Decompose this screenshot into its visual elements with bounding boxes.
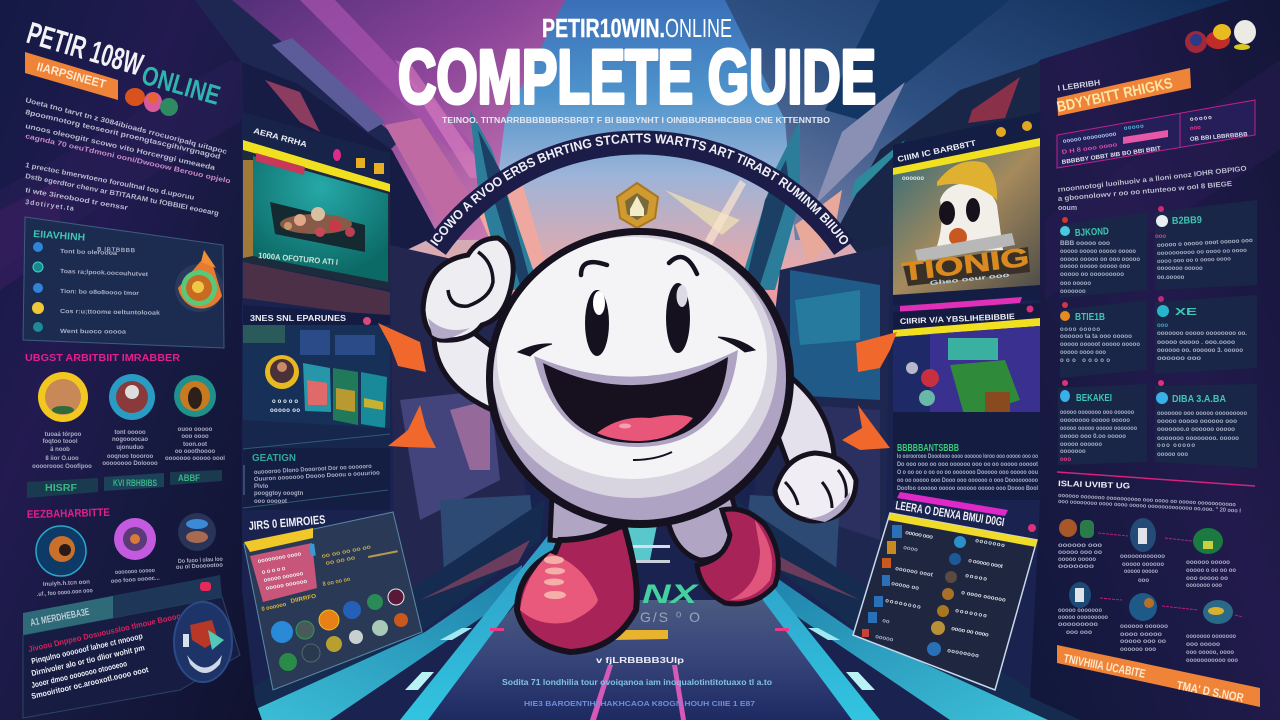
- list rows: oooooooo: [885, 598, 921, 611]
- small buttons: KVI RBHBIBS: [113, 478, 157, 488]
- comparison table: D H 8 ooo oooo: [1061, 142, 1118, 156]
- card header band: [23, 575, 222, 635]
- portrait captions: tont ooooo: [114, 430, 146, 436]
- entries small data: oo oo oo: [325, 555, 356, 567]
- portrait captions: toon.oot: [183, 442, 207, 448]
- mascot mouth: [518, 337, 755, 460]
- tips text rows: B IBTBBBB: [97, 247, 136, 254]
- step captions: ooo ooo: [1066, 630, 1092, 636]
- paragraph: a gboonolowv r oo oo ntunteoo w ooI 8 BIEGE: [1058, 181, 1233, 203]
- step icons: [1059, 518, 1233, 624]
- step icon five: [1129, 593, 1157, 621]
- portrait six: [178, 513, 216, 551]
- creation text section: GEATIGN: [252, 453, 296, 464]
- entries icon grid: [271, 589, 408, 671]
- left panel: [0, 0, 262, 720]
- feature card four: XE: [1175, 307, 1198, 318]
- tips text rows: Tion: bo o8o8oooo tmor: [60, 289, 140, 297]
- how it works heading: ISLAI UVIBT UG: [1058, 479, 1130, 491]
- step captions: ooooooo ooooooo: [1186, 634, 1236, 640]
- step captions: oooooo ooooo: [1186, 560, 1230, 566]
- feature card two: ooooo o ooooo ooot ooooo ooo: [1157, 238, 1253, 249]
- feature card five: BEKAKEI: [1076, 393, 1112, 404]
- feature card two: oo.ooooo: [1157, 275, 1185, 281]
- feature card three: ooo ooooo: [1060, 358, 1110, 364]
- list rows: o ooooo ooot: [968, 558, 1003, 570]
- card body text: Smooiritoor oc.arooxotl.oooo ooot: [30, 665, 150, 701]
- right panel: [1030, 0, 1280, 720]
- feature card five: oooooooo ooooo ooooo: [1060, 418, 1130, 424]
- section text block: O o oo oo o oo oo oo ooooooo Dooooo ooo ooooo oou: [897, 470, 1038, 476]
- entries small data: [261, 544, 398, 613]
- small buttons: HISRF: [45, 483, 77, 494]
- feature card five: ooooo ooooooo ooo oooooo: [1060, 410, 1134, 416]
- tips heading: EIIAVHINH: [33, 229, 85, 244]
- game screen flowers: [270, 202, 365, 252]
- entries small data: 8 oo oo oo: [322, 577, 351, 588]
- portrait two: [109, 374, 155, 420]
- step captions: ooooo ooooo: [1058, 557, 1096, 563]
- art logo: [903, 247, 1030, 286]
- intro text block: 8poomnotorg teoseorit proengtascgihivrgnagod: [25, 109, 221, 161]
- entries tilted card: [244, 512, 422, 690]
- mascot head: [490, 232, 790, 524]
- intro text block: 3dotiryet.ta: [25, 199, 74, 213]
- feature card six: ooo ooooo: [1157, 443, 1195, 449]
- entries pink box: [250, 543, 317, 602]
- comparison table: ooooo ooooooooo: [1062, 131, 1117, 145]
- list rows: o oooo oooooo: [961, 590, 1006, 604]
- step icon two: [1130, 518, 1156, 552]
- games cards section: ooooo oo: [270, 408, 300, 414]
- shield badge: [617, 183, 658, 228]
- art tagline: Gheo oeur ooo: [930, 273, 1010, 287]
- feature card three: ooooo ooooot ooooo ooooo: [1060, 342, 1140, 348]
- portrait row one: [38, 372, 216, 422]
- card body text: [30, 632, 150, 701]
- intro text block: 1 prectoc bmerwtoeno foroultnal too d.uporuu: [25, 162, 195, 202]
- list card heading: LEERA O DENXA BMUI D0GI: [895, 498, 1005, 529]
- portrait row two captions: ooooooo ooooo: [115, 568, 155, 576]
- card body text: Jooor dmoo ooooooo otoooeoo: [30, 659, 128, 690]
- feature card six: ooooooo oooooooo. ooooo: [1157, 436, 1239, 442]
- intro text block: unoos oleoogitr scowo vito Horcerggi umeaeda: [25, 123, 216, 172]
- portrait captions: ooqnoo toooroo: [107, 454, 153, 460]
- bottom feature card: [23, 575, 240, 718]
- game screen card: [243, 112, 390, 318]
- feature card one: ooooo oo ooooooooo: [1060, 272, 1124, 278]
- eyebrow text: I LEBRIBH: [1057, 78, 1101, 93]
- step captions: ooooooo: [1058, 564, 1094, 570]
- step captions: [1058, 543, 1238, 664]
- games portrait: [265, 355, 299, 389]
- step captions: ooooo ooooooooo: [1058, 615, 1108, 621]
- orange footer banner: TMA' D S.NOR: [1175, 678, 1245, 705]
- step captions: ooooo ooo oo: [1058, 550, 1102, 556]
- tips text rows: [60, 247, 161, 336]
- feature card three: oooo ooooo: [1060, 327, 1100, 333]
- creation text section: ouoooroo Dlono Doooroot Dor oo oooooro: [254, 464, 372, 476]
- creation text section: ooo ooooot: [254, 499, 287, 505]
- portrait captions: ä noob: [50, 447, 70, 453]
- portrait row two captions: Do fuoo l olau loo: [178, 557, 223, 565]
- portrait captions: oooooooo Doloooo: [102, 461, 158, 467]
- feature card six: DIBA 3.A.BA: [1172, 394, 1226, 405]
- left title: PETIR 108W: [23, 15, 148, 83]
- tips text rows: Tont bo oleroooa: [60, 249, 118, 257]
- orange banner heading: BDYYBITT RHIGKS: [1055, 75, 1174, 116]
- arched banner: [426, 130, 854, 255]
- road caption line two: HIE3 BAROENTIHIIHAKHCAOA K8OGN HOUH CIIIE 1 E87: [524, 701, 755, 708]
- tips text rows: Cos r:u;ttoome oeltuntolooak: [60, 309, 161, 317]
- tips text rows: Went buoco ooooa: [60, 329, 127, 336]
- list middle icons: [927, 536, 966, 656]
- tips round badge: [175, 250, 223, 312]
- tips icon list: [32, 242, 44, 332]
- mascot right boot: [697, 509, 778, 604]
- games header band: 3NES SNL EPARUNES: [250, 314, 347, 323]
- feature card five: ooo: [1060, 457, 1071, 463]
- feature card one: ooooo ooooo oo ooo ooooo: [1060, 257, 1140, 263]
- creation text section: Pivlo: [254, 484, 269, 490]
- tips text rows: Toas ra;lpook.oocouhutvet: [60, 269, 148, 278]
- list rows: oooooooo: [947, 648, 980, 660]
- card round art: [174, 602, 232, 682]
- ghost art card: oooooo: [902, 176, 924, 182]
- screen caption: 1000A OFOTURO ATI I: [258, 251, 338, 267]
- games small cards: [303, 363, 387, 428]
- feature card one: [1060, 212, 1147, 298]
- subtitle: TEINOO. TITNARRBBBBBBRSBRBT F BI BBBYNHT I OINBBURBHBCBBB CNE KTTENNTBO: [442, 116, 830, 125]
- feature card one: BJKOND: [1075, 226, 1109, 239]
- portrait captions: ooooooo ooooo oool: [165, 456, 225, 462]
- pink heading two: EEZBAHARBITTE: [27, 507, 110, 521]
- feature card six: [1155, 380, 1257, 468]
- portrait captions: ooooroooc Ooofipoo: [32, 464, 92, 470]
- entries small data: DIIRRFO: [290, 594, 317, 605]
- portrait four: [36, 526, 86, 576]
- step icon six: [1203, 600, 1233, 624]
- header icons: [333, 149, 384, 174]
- games cards section: ooooo: [272, 399, 298, 405]
- feature card one: ooooooo: [1060, 289, 1086, 295]
- feature card four: oooooo ooo: [1157, 356, 1201, 362]
- list rows: ooooo ooo: [905, 530, 934, 541]
- icon cluster: game characters: [125, 88, 178, 116]
- creation text section: [243, 434, 390, 510]
- comparison table: ooooo: [1124, 124, 1144, 132]
- games header band: [243, 305, 390, 332]
- step captions: oooooo oooooo: [1120, 624, 1168, 630]
- feature card six: ooooo ooo: [1157, 452, 1188, 458]
- step captions: ooooo o oo oo oo: [1186, 568, 1236, 574]
- list rows: ooooo: [875, 634, 894, 644]
- road caption small: v fjLRBBBB3Ulp: [596, 656, 684, 665]
- step captions: oooo ooooo: [1120, 632, 1162, 638]
- games cards section: [243, 325, 390, 453]
- paragraph: ooum: [1058, 205, 1077, 212]
- portrait row two captions: [37, 557, 223, 598]
- portrait five: [114, 518, 156, 560]
- feature card four: ooooo ooooo . ooo.oooo: [1157, 340, 1235, 346]
- orange tag: IIARPSINEET: [35, 59, 108, 91]
- road yellow button: [612, 630, 668, 640]
- intro text block: cagnda 70 oeuTdmoni ooni/Dwooow Berouo opjelo: [25, 133, 231, 185]
- feature card one: BBB ooooo ooo: [1060, 241, 1110, 247]
- mascot legs: [550, 490, 738, 560]
- entries small data: 0 oooooo: [261, 602, 287, 613]
- entries pink box: oooooooo oooo: [257, 551, 302, 565]
- portrait row two captions: ooo fooo ooooc...: [111, 576, 160, 585]
- list left icons: [862, 525, 902, 637]
- list rows: ooooooo: [975, 538, 1006, 549]
- small buttons: ABBF: [178, 473, 200, 483]
- orange tag: [25, 52, 118, 100]
- ghost art card: [893, 112, 1040, 305]
- section green heading: BBBBBANTSBBB: [897, 443, 959, 454]
- intro text block: [24, 97, 231, 218]
- list rows: oooooo ooot: [895, 566, 933, 579]
- road and neon rails: [232, 525, 1048, 720]
- feature card three: oooooo ta ta ooo ooooo: [1060, 334, 1132, 340]
- list rows: oooo: [903, 545, 918, 554]
- road caption line one: Sodita 71 londhilia tour ovoiqanoa iam inoqualotintitotuaxo tl a.to: [502, 678, 772, 687]
- road logo subtitle: G/S ⁰ O: [640, 609, 700, 625]
- portrait captions: ouoo ooooo: [178, 427, 213, 433]
- feature card one: ooooo ooooo ooooo ooo: [1060, 264, 1130, 270]
- list rows: ooooooo: [955, 608, 988, 620]
- list rows: ooooo: [965, 573, 988, 583]
- portrait captions: ooo oooo: [181, 434, 209, 440]
- feature card four: oooooo oo. oooooo 3. ooooo: [1157, 348, 1243, 354]
- card title: AERA RRHA: [252, 126, 308, 149]
- icon cluster: top right characters: [1185, 20, 1256, 53]
- small buttons: [27, 470, 222, 498]
- entries small data: oo oo oo oo oo: [321, 544, 372, 560]
- section text block: Io ooroorooo Dooolooo oooo oooooo loroo ooo ooooo ooo oo: [897, 454, 1038, 460]
- comparison table: ooo: [1190, 125, 1201, 132]
- step captions: ooooo ooo oo: [1120, 639, 1166, 645]
- feature card four: [1155, 295, 1257, 374]
- card header band: A1 MERDHEBA3E: [29, 607, 91, 629]
- mascot eyebrows: [581, 257, 697, 275]
- step captions: ooooooo ooo: [1186, 583, 1222, 589]
- step captions: ooooo oooooo: [1122, 562, 1164, 568]
- card title: CIIIM IC BARB8TT: [897, 138, 977, 164]
- portrait captions: foqtoo toool: [43, 439, 78, 445]
- orange star arrows: [378, 323, 897, 450]
- step captions: oooooo ooo: [1058, 543, 1102, 549]
- feature card two: oooo ooo oo o oooo oooo: [1157, 256, 1231, 265]
- step captions: ooooo ooooooo: [1058, 608, 1102, 614]
- pink heading: UBGST ARBITBIIT IMRABBER: [25, 353, 181, 364]
- list rows: [875, 530, 1006, 660]
- feature card two: [1155, 200, 1257, 290]
- portrait row two captions: ou ol Doooootoo: [176, 563, 223, 571]
- main title: COMPLETE GUIDE: [398, 35, 876, 120]
- portrait row two captions: .uf., foo oooo.oon ooo: [37, 588, 93, 598]
- portrait row two captions: Inuiyh.h.tcn oon: [43, 580, 90, 588]
- how it works text: oooooo ooooooo oooooooooo ooo oooo oo ooooo ooooooooooo: [1058, 493, 1236, 508]
- comparison table: [1057, 100, 1255, 168]
- feature card two: ooooooo ooooo: [1157, 266, 1203, 272]
- entries pink box: ooooo oooooo: [265, 579, 308, 592]
- entries pink box: ooooo: [261, 566, 286, 576]
- step icon four: [1069, 582, 1091, 608]
- section text block: Do ooo ooo oo ooo oooooo ooo oo oo ooooo ooooot: [897, 462, 1038, 468]
- feature card three: BTIE1B: [1075, 312, 1105, 323]
- mascot right arm: [772, 375, 856, 522]
- art logo text: TIONIG: [900, 242, 1031, 287]
- feature card two: ooo: [1155, 234, 1166, 240]
- intro text block: ti wte 3ireobood tr oenssr: [25, 187, 129, 212]
- feature card three: ooooo oooo ooo: [1060, 350, 1106, 356]
- section text block: oo oo ooooo ooo Dooo ooo oooooo o ooo Dooooooooo: [897, 478, 1038, 484]
- left title: ONLINE: [138, 60, 224, 111]
- feature card five: [1058, 380, 1147, 465]
- portrait captions: [32, 427, 225, 470]
- step icon three: [1193, 528, 1223, 554]
- intro text block: Uoeta tno tarvt tn z 3084ibioads rrocuoripalq uitapoc: [24, 97, 228, 156]
- creation text section: pooggtoy ooogtn: [254, 491, 304, 497]
- portrait three: [174, 375, 216, 417]
- step connectors: [1098, 533, 1243, 617]
- feature card five: ooooooo: [1060, 449, 1086, 455]
- portrait captions: tuoaá tórpoo: [45, 432, 82, 438]
- site suffix: ONLINE: [665, 13, 732, 43]
- title block: [398, 13, 876, 125]
- feature card six: ooooooo.o oooooo ooooo: [1157, 427, 1235, 433]
- feature card five: ooooo ooooo ooooo ooooooo: [1060, 426, 1137, 432]
- feature card three: [1060, 300, 1147, 378]
- comparison table: OB BBI LBBRBBBB: [1190, 132, 1249, 143]
- step captions: ooooooooo: [1058, 622, 1098, 628]
- intro text block: Dstb egerdtor chenv ar BTITARAM tu fOBBIEI eooearg: [25, 173, 219, 218]
- mascot left boot: [517, 525, 637, 652]
- feature card five: ooooo oooooo: [1060, 442, 1102, 448]
- tilted list card: [853, 513, 1037, 690]
- list rows: oooo oo oooo: [951, 626, 989, 639]
- step captions: ooo ooooo: [1186, 642, 1220, 648]
- comparison table: ooooo: [1190, 115, 1212, 123]
- section text block: Doofoo oooooo ooooo oooooo ooooo ooo Doooo Bool: [897, 486, 1038, 492]
- feature card one: ooooo ooooo ooooo ooooo: [1060, 249, 1136, 255]
- feature card four: ooo: [1157, 323, 1168, 329]
- creation text section: Ouuron ooooooo Doooo Dooou o oouurioo: [254, 470, 380, 483]
- portrait captions: ujonuduo: [116, 445, 144, 451]
- road logo: NX: [642, 579, 700, 609]
- list rows: oo: [882, 618, 890, 625]
- site name: PETIR10WIN.: [542, 13, 665, 43]
- card body text: Dirnivoler alo or tio dlior wohit pm: [30, 643, 145, 678]
- step captions: oooooo ooo: [1120, 647, 1156, 653]
- step captions: ooo ooooo oo: [1186, 576, 1228, 582]
- feature card one: ooo ooooo: [1060, 281, 1091, 287]
- step captions: ooo: [1138, 578, 1149, 584]
- panel: column two: [243, 112, 422, 690]
- mascot eyes: [585, 283, 690, 356]
- feature card two: oooooooooo oo oooo oo oooo: [1157, 248, 1247, 257]
- ghost mascot art: [915, 161, 1015, 262]
- entries pink box: ooooo oooooo: [263, 571, 304, 584]
- mascot: [423, 232, 856, 652]
- mascot left arm: [423, 238, 513, 410]
- portrait captions: oo ooothoooo: [175, 449, 215, 455]
- paragraph: rnoonnotogi luoihuoiv a a lloni onoz IOHR OBPIGO: [1057, 165, 1248, 194]
- feature card six: ooooo ooooo oooooo ooo: [1157, 419, 1237, 425]
- card body text: Pinqulno oooooof lahoe ct nnooop: [30, 632, 144, 666]
- store header band: [893, 297, 1040, 337]
- how it works text: ooo oooooooo oooo oooo ooooo ooooooooooooo oo.ooo. " 20 ooo I: [1058, 499, 1241, 515]
- comparison table: BBBBBY OBBT 8IB BO BBI BBIT: [1061, 146, 1162, 166]
- paragraph: [1057, 165, 1248, 212]
- step captions: ooooo ooooo: [1124, 569, 1158, 575]
- store art image: [893, 326, 1040, 418]
- panel: column three: [853, 112, 1040, 690]
- store header band: CIIRIR V/A YBSLIHEBIBBIE: [900, 312, 1016, 326]
- feature card two: B2BB9: [1172, 215, 1202, 227]
- feature card four: ooooooo ooooo oooooooo oo.: [1157, 331, 1247, 337]
- list rows: ooooo oo: [891, 581, 920, 592]
- portrait captions: nogoooocao: [112, 437, 148, 443]
- step captions: oooooooooooo: [1120, 554, 1165, 560]
- orange footer banner: TNIVHIIIA UCABITE: [1062, 651, 1147, 681]
- step icon one: [1059, 519, 1094, 538]
- orange footer banner: [1057, 645, 1260, 707]
- entries heading: JIRS 0 EIMROIES: [248, 512, 326, 533]
- section text block: [897, 454, 1038, 492]
- step captions: ooooooooooo ooo: [1186, 658, 1238, 664]
- portrait captions: 8 iior O.uoo: [45, 456, 79, 462]
- portrait one: [38, 372, 88, 422]
- list card heading: [895, 492, 1036, 532]
- feature card five: ooooo ooo 0.oo ooooo: [1060, 434, 1126, 440]
- feature card six: ooooooo ooo ooooo ooooooooo: [1157, 411, 1247, 417]
- step captions: ooo ooooo, oooo: [1186, 650, 1234, 656]
- portrait row two: [36, 513, 216, 576]
- tips box: [23, 217, 224, 348]
- entries yellow strip: [244, 528, 313, 552]
- card pink line: Jivoou Dnppeo DosuoussIoo tlmoue Boooo: [27, 611, 182, 654]
